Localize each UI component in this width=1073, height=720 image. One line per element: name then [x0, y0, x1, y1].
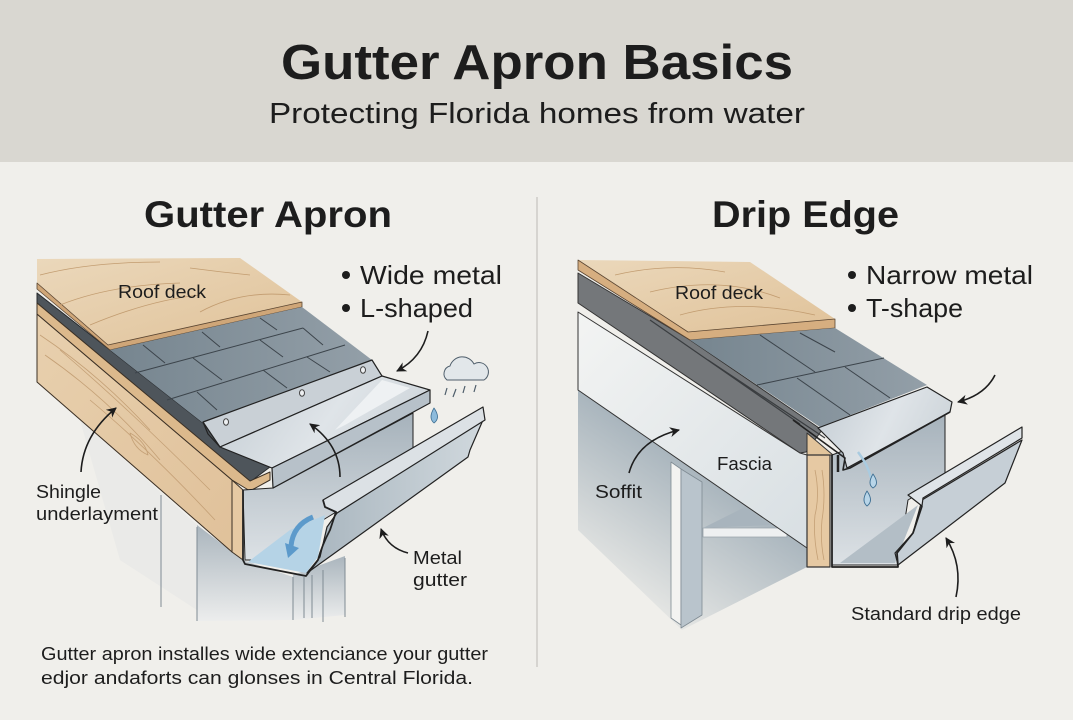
- labels: gutter apron: Shingle: [36, 481, 101, 502]
- drip edge flashing: [793, 387, 952, 472]
- bullet list: gutter apron: [342, 260, 502, 323]
- wall shadows and posts: [80, 420, 345, 622]
- caption: edjor andaforts can glonses in Central Florida.: [41, 668, 473, 688]
- labels: drip edge: Soffit: [595, 481, 642, 502]
- caption: [41, 644, 488, 688]
- callout arrows: [629, 375, 995, 597]
- illustration: drip edge assembly: [578, 260, 1022, 630]
- illustration: gutter apron assembly: [37, 258, 488, 622]
- flow arrow in gutter: [285, 517, 313, 558]
- bullet list: drip edge: [848, 260, 1033, 323]
- caption: Gutter apron installes wide extenciance your gutter: [41, 644, 488, 664]
- title: Gutter Apron Basics: [281, 36, 793, 90]
- labels: gutter apron: Roof deck: [118, 281, 207, 302]
- rain cloud icon: [444, 357, 488, 397]
- labels: gutter apron: [36, 281, 467, 590]
- gutter back wall: [243, 413, 413, 560]
- header band: [0, 0, 1073, 162]
- shingles: [110, 307, 372, 423]
- heading: drip edge: Drip Edge: [712, 194, 899, 235]
- soffit and posts: [578, 390, 807, 630]
- step flashing edge: [650, 320, 825, 438]
- labels: drip edge: Fascia: [717, 453, 773, 474]
- shingles: [690, 328, 927, 427]
- trim board: [37, 303, 270, 491]
- labels: drip edge: Roof deck: [675, 282, 764, 303]
- gutter profile: [832, 427, 1022, 567]
- apron flashing: [203, 360, 430, 488]
- heading: gutter apron: Gutter Apron: [144, 194, 392, 235]
- bullet list: gutter apron: L-shaped: [360, 293, 473, 323]
- underlayment strip: [37, 293, 270, 482]
- bullet list: drip edge: T-shape: [866, 293, 963, 323]
- roof deck: [37, 258, 302, 350]
- roof deck: [578, 260, 835, 340]
- panel: gutter apron: [36, 194, 502, 688]
- water in gutter: [248, 515, 325, 573]
- gutter trough: [243, 407, 485, 576]
- water drop: [431, 408, 438, 423]
- water drops: [858, 452, 876, 506]
- gutter back wall: [832, 413, 945, 565]
- labels: gutter apron: underlayment: [36, 503, 158, 524]
- labels: gutter apron: Metal: [413, 547, 462, 568]
- fascia panel: [578, 312, 807, 548]
- bullet list: gutter apron: Wide metal: [360, 260, 502, 290]
- labels: gutter apron: gutter: [413, 569, 467, 590]
- underlayment strip: [578, 273, 822, 453]
- subtitle: Protecting Florida homes from water: [269, 98, 805, 130]
- panel: drip edge: [578, 194, 1033, 630]
- wood end cut: [807, 433, 833, 567]
- labels: drip edge: [595, 282, 1021, 624]
- callout arrows: [81, 331, 428, 553]
- labels: drip edge: Standard drip edge: [851, 603, 1021, 624]
- bullet list: drip edge: Narrow metal: [866, 260, 1033, 290]
- fascia board: [37, 314, 232, 552]
